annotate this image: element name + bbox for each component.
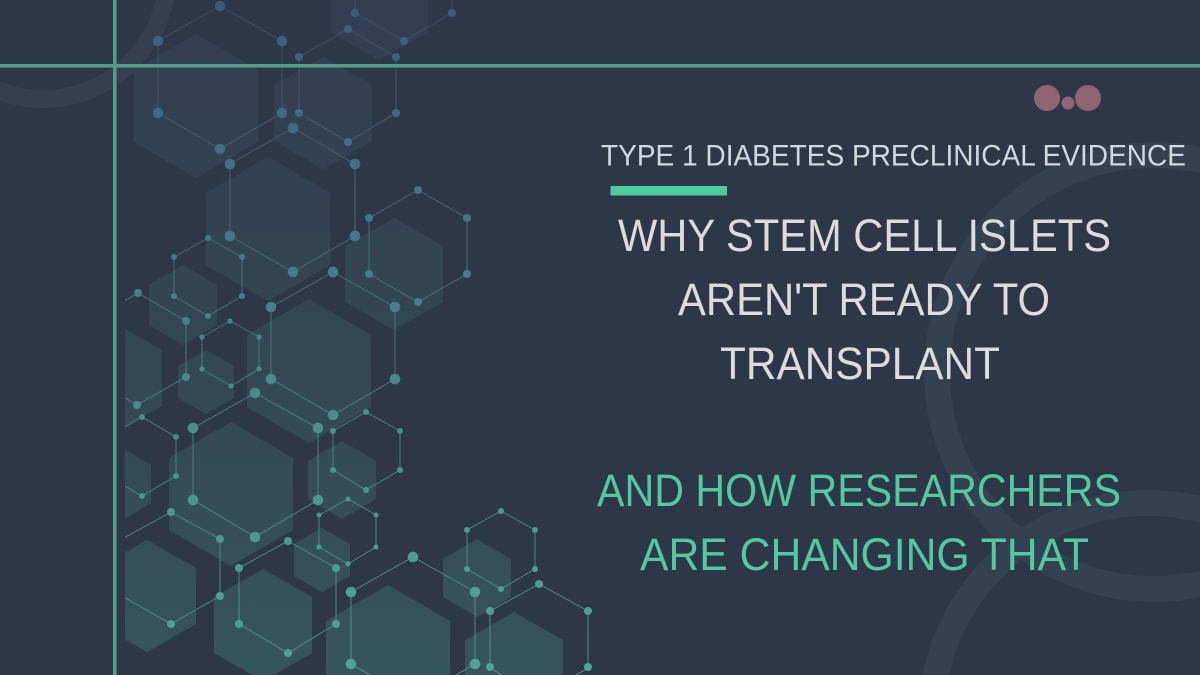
frame line: vertical bbox=[113, 0, 117, 675]
secondary title: ARE CHANGING THAT bbox=[640, 529, 1089, 580]
accent bar bbox=[610, 186, 727, 196]
title: WHY STEM CELL ISLETS bbox=[618, 210, 1111, 261]
secondary title: AND HOW RESEARCHERS bbox=[597, 465, 1121, 516]
secondary title bbox=[597, 465, 1121, 580]
title: TRANSPLANT bbox=[720, 338, 1000, 389]
title: AREN'T READY TO bbox=[678, 274, 1050, 325]
ring: top left bbox=[0, 0, 174, 108]
icon: logo dots bbox=[1034, 85, 1101, 111]
outlined hexagons with nodes bbox=[90, 0, 592, 675]
filled hexagons bbox=[125, 0, 563, 675]
molecular hexagon network bbox=[125, 0, 592, 675]
ring: right large bbox=[924, 142, 1200, 602]
frame line: horizontal bbox=[0, 64, 1200, 68]
title bbox=[618, 210, 1111, 389]
ring: bottom right bbox=[922, 490, 1200, 675]
